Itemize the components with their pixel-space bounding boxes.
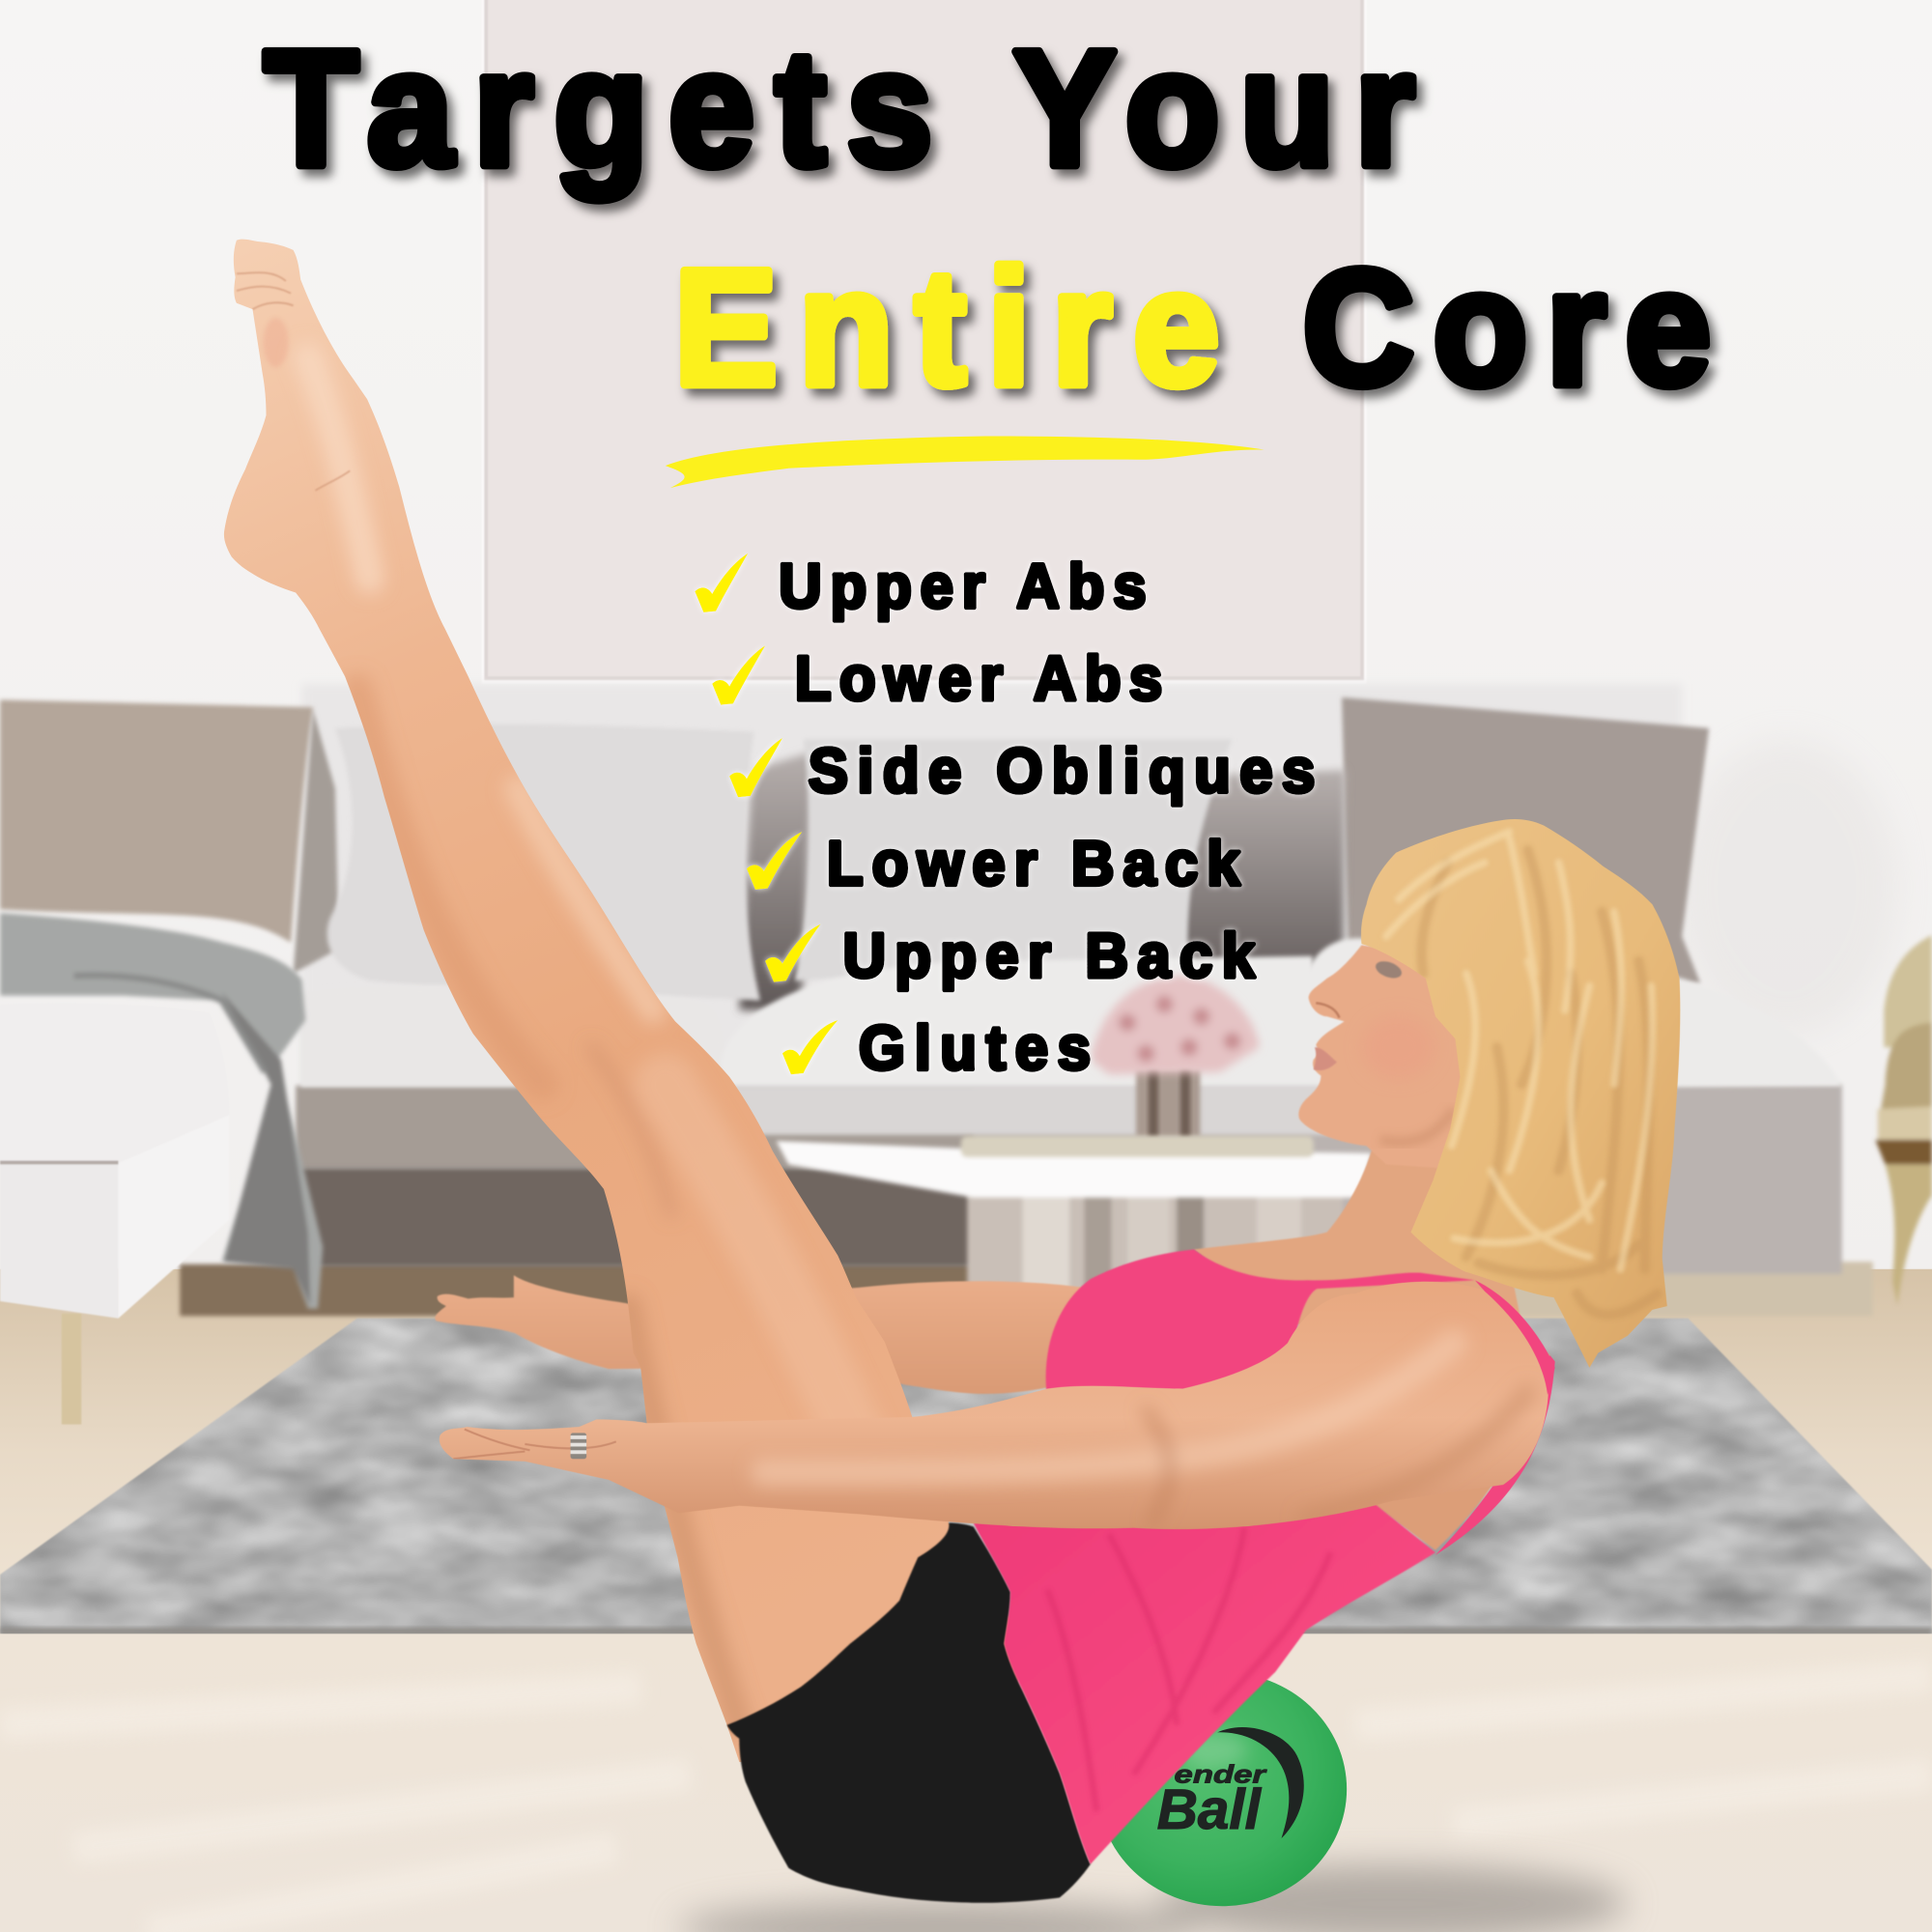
armchair: [1875, 935, 1932, 1306]
upper floor: [0, 1269, 1932, 1638]
title line 1: Targets Your: [264, 16, 1415, 201]
wall: [0, 0, 1932, 1306]
sofa arm strip: [294, 710, 339, 974]
pink top lower: [974, 1498, 1435, 1864]
rug: [0, 1319, 1932, 1634]
wall shading right: [1676, 739, 1897, 1035]
fingers: [453, 1430, 616, 1459]
coffee table and vase: [777, 976, 1372, 1290]
floor planks: [0, 1676, 1932, 1932]
foot details: [237, 272, 350, 491]
book: [961, 1136, 1314, 1157]
top strap: [1475, 1280, 1555, 1395]
table top: [777, 1141, 1372, 1198]
title: [264, 16, 1711, 420]
sofa base upper: [296, 1086, 985, 1169]
neck and chest: [1194, 1109, 1521, 1324]
exercise ball: Ball: [1157, 1778, 1263, 1841]
title line 2: highlighted word: Entire: [674, 236, 1219, 420]
dark gap left: [739, 752, 813, 1010]
exercise ball: [1097, 1672, 1347, 1906]
sofa base lower: [296, 1168, 985, 1266]
arm shading: [453, 1343, 1528, 1521]
wall picture panel: [482, 0, 1367, 684]
jaw shadow: [1380, 1109, 1454, 1142]
hair: [1361, 819, 1680, 1368]
ball sheen: [1179, 1732, 1248, 1767]
eye: [1374, 958, 1404, 981]
item: upper back: Upper Back: [842, 922, 1256, 991]
left tan pillow: [0, 699, 313, 943]
ball logo text: ender: [1175, 1762, 1268, 1789]
item: lower abs: Lower Abs: [795, 644, 1162, 714]
sofa back: [301, 684, 1682, 1091]
title line 2: second word: Core: [1302, 236, 1711, 420]
lips: [1314, 1047, 1337, 1070]
hair strands: [1386, 832, 1658, 1315]
left white pillow: [327, 724, 760, 1001]
item: upper abs: Upper Abs: [779, 552, 1147, 621]
left seat cushion: [300, 985, 724, 1087]
pink side sliver: [1435, 1355, 1555, 1555]
center seat cushion: [721, 956, 1324, 1090]
vase: [1136, 1069, 1200, 1137]
black shorts: [727, 1523, 1091, 1903]
sofa: [0, 684, 1842, 1274]
rug front edge: [0, 1628, 1932, 1635]
dark gap right: [1180, 770, 1346, 998]
right gray pillow: [1342, 697, 1709, 983]
body skin behind arm: [1355, 1293, 1550, 1550]
back arm: [435, 1275, 1084, 1394]
ball logo arc: [1217, 1727, 1304, 1838]
cheek: [1361, 1015, 1435, 1079]
raised leg: [224, 240, 1023, 1762]
floor foreground: [0, 1634, 1932, 1932]
top folds: [1047, 1528, 1331, 1811]
leg shading: [237, 272, 863, 1725]
checklist: [695, 552, 1315, 1083]
seat shadow band: [721, 1086, 1337, 1135]
item: lower back: Lower Back: [827, 829, 1240, 898]
floor shadow under sofa: [180, 1264, 993, 1316]
front arm: [440, 1282, 1548, 1529]
gray blanket: [0, 913, 323, 1309]
yellow brush underline: [666, 437, 1264, 488]
nostril: [1316, 1003, 1339, 1018]
item: side obliques: Side Obliques: [809, 737, 1315, 807]
sofa base right: [974, 1084, 1842, 1274]
pink flowers: [1091, 976, 1260, 1074]
table legs: [967, 1189, 1343, 1290]
ring: [571, 1433, 586, 1459]
woman exercising: [224, 240, 1680, 1906]
right seat cushion and arm: [1306, 938, 1842, 1090]
item: glutes: Glutes: [859, 1014, 1091, 1083]
center pillow: [795, 739, 1233, 980]
pink top upper: [1046, 1249, 1475, 1399]
floor shadow: [678, 1864, 1627, 1932]
ottoman: [0, 1003, 229, 1424]
face: [1298, 945, 1479, 1171]
